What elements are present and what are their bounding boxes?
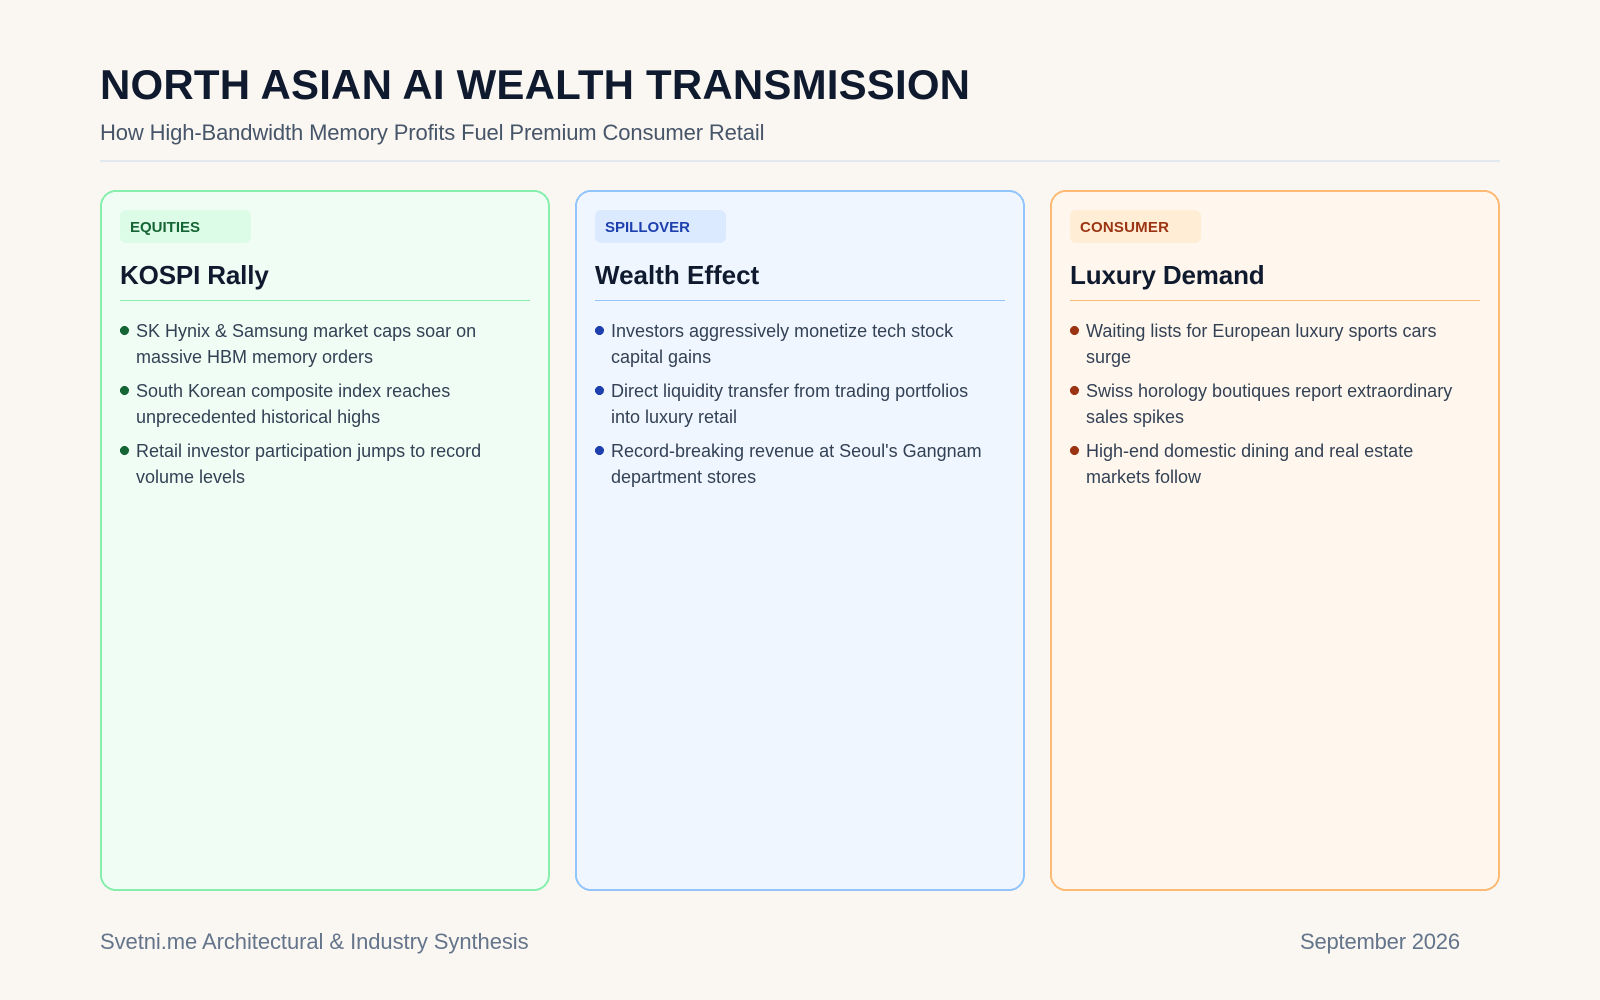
bullet: retail investors: volume levels (136, 467, 245, 487)
bullet: record revenue: department stores (611, 467, 756, 487)
panel: spillover (575, 190, 1025, 891)
heading: Wealth Effect: Wealth Effect (595, 260, 759, 290)
badge: equities: EQUITIES (130, 219, 200, 236)
bullet: horology: Swiss horology boutiques report extraordinary (1086, 381, 1452, 401)
subtitle: How High-Bandwidth Memory Profits Fuel Premium Consumer Retail (100, 120, 764, 145)
bullet: retail investors: Retail investor participation jumps to record (136, 441, 481, 461)
bullet: sports cars: surge (1086, 347, 1131, 367)
bullet: capital gains (595, 321, 954, 367)
bullet: market caps (120, 321, 476, 367)
bullet: composite index: unprecedented historical highs (136, 407, 380, 427)
bullet: capital gains: Investors aggressively monetize tech stock (611, 321, 953, 341)
panel: equities (100, 190, 550, 891)
badge: consumer (1070, 210, 1201, 243)
bullet: horology (1070, 381, 1452, 427)
bullet: liquidity transfer (595, 381, 968, 427)
bullet: sports cars (1070, 321, 1436, 367)
bullet: sports cars: Waiting lists for European luxury sports cars (1086, 321, 1436, 341)
bullet: composite index: South Korean composite index reaches (136, 381, 450, 401)
footer: source: Svetni.me Architectural & Industry Synthesis (100, 929, 529, 954)
bullet: capital gains: capital gains (611, 347, 711, 367)
bullet: horology: sales spikes (1086, 407, 1184, 427)
bullet: dining and real estate (1070, 441, 1413, 487)
title: NORTH ASIAN AI WEALTH TRANSMISSION (100, 61, 970, 108)
bullet: record revenue: Record-breaking revenue at Seoul's Gangnam (611, 441, 982, 461)
bullet: market caps: massive HBM memory orders (136, 347, 373, 367)
badge: equities (120, 210, 251, 243)
footer: date: September 2026 (1300, 929, 1460, 954)
badge: spillover (595, 210, 726, 243)
bullet: composite index (120, 381, 450, 427)
panel: consumer (1050, 190, 1500, 891)
bullet: retail investors (120, 441, 481, 487)
bullet: dining and real estate: markets follow (1086, 467, 1201, 487)
bullet: liquidity transfer: Direct liquidity transfer from trading portfolios (611, 381, 968, 401)
bullet: liquidity transfer: into luxury retail (611, 407, 737, 427)
bullet: record revenue (595, 441, 982, 487)
bullet: dining and real estate: High-end domestic dining and real estate (1086, 441, 1413, 461)
badge: spillover: SPILLOVER (605, 219, 690, 236)
heading: KOSPI Rally: KOSPI Rally (120, 260, 269, 290)
heading: Luxury Demand: Luxury Demand (1070, 260, 1265, 290)
bullet: market caps: SK Hynix & Samsung market caps soar on (136, 321, 476, 341)
badge: consumer: CONSUMER (1080, 219, 1169, 236)
